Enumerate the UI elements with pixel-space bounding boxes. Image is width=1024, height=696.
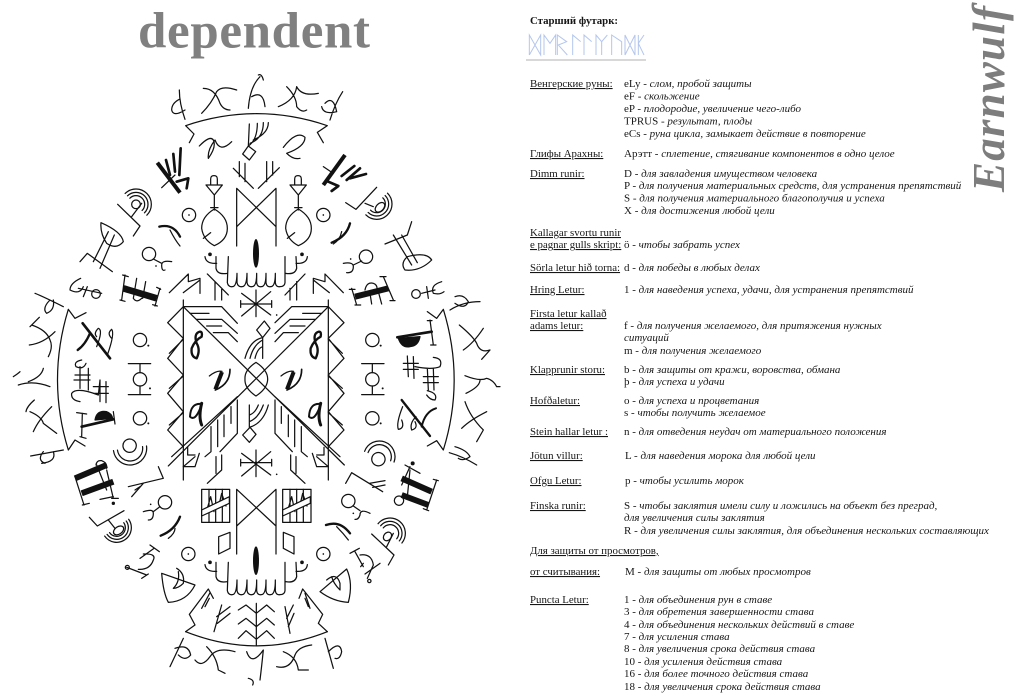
- stave: central square: [168, 290, 344, 483]
- rainbow rune: [104, 519, 137, 548]
- inner top runes: [199, 123, 305, 160]
- legend: Stein hallar letur: Stein hallar letur :: [530, 426, 608, 438]
- bold rune left: [157, 163, 180, 193]
- legend: Klapprunir storu: b - для защиты от кражи, воровства, обмана: [624, 364, 841, 376]
- bottom arc banner: [186, 603, 327, 646]
- ladder rune: [72, 360, 108, 403]
- rainbow stave: [118, 203, 142, 236]
- legend: Kallagar svortu runir: [530, 227, 740, 251]
- square frame: [183, 300, 328, 480]
- left amulet: [202, 176, 227, 246]
- legend: Hungarian runes: [530, 78, 866, 140]
- legend: Hungarian runes: Венгерские руны:: [530, 78, 613, 90]
- right amulet: [286, 176, 311, 246]
- circle marks: [182, 208, 196, 222]
- legend: anti-reading: M - для защиты от любых просмотров: [625, 566, 811, 578]
- rainbow rune: [366, 193, 398, 226]
- stave: lower-left outer runes: [75, 461, 163, 578]
- centre ellipse: [245, 362, 268, 396]
- legend: Firsta letur: [530, 308, 882, 357]
- bold H rune: [355, 288, 388, 297]
- leaf stave: [80, 223, 123, 272]
- bold rune right: [323, 155, 345, 185]
- legend: Hungarian runes: eF - скольжение: [624, 90, 700, 102]
- leaf stave: [385, 222, 432, 270]
- rainbow rune: [361, 437, 399, 471]
- legend: Ofgu Letur: Ofgu Letur:: [530, 475, 582, 487]
- fork runes: [214, 605, 294, 633]
- legend: Dimm runir: [530, 168, 962, 217]
- legend: Firsta letur: m - для получения желаемого: [624, 345, 762, 357]
- Z rune: [402, 400, 430, 436]
- legend: anti-reading: от считывания:: [530, 566, 600, 578]
- lower oval: [253, 546, 259, 575]
- stave: top section: [142, 75, 373, 300]
- stave: right side: [349, 277, 500, 471]
- bottom arc runes: [170, 638, 342, 685]
- top snowflake: [241, 290, 272, 317]
- legend: Firsta letur: ситуаций: [624, 332, 669, 344]
- left arc runes: [13, 293, 63, 463]
- bold H rune: [123, 288, 157, 298]
- left bold letters: [190, 332, 230, 425]
- legend: Hofdaletur: s - чтобы получить желаемое: [624, 407, 766, 419]
- top fan rune: [245, 321, 270, 358]
- legend: Dimm runir: Dimm runir:: [530, 168, 585, 180]
- legend: Puncta Letur: 8 - для увеличения срока действия става: [624, 643, 816, 655]
- Z rune: [83, 323, 110, 358]
- thorn rune: [82, 419, 113, 427]
- legend: Firsta letur: adams letur:: [530, 320, 583, 332]
- legend: Dimm runir: D - для завладения имуществом человека: [624, 168, 818, 180]
- lower mask: [205, 562, 307, 595]
- legend: Puncta Letur: 3 - для обретения завершенности става: [624, 606, 814, 618]
- legend: Klapprunir storu: þ - для успеха и удачи: [624, 376, 725, 388]
- right zigzag: [328, 307, 344, 447]
- left arc banner: [57, 309, 86, 450]
- o-f rune: [412, 290, 420, 298]
- column of circles: [133, 333, 147, 347]
- legend: Dimm runir: S - для получения материального благополучия и успеха: [624, 192, 885, 204]
- lower circles: [182, 547, 195, 561]
- small hook rune: [127, 545, 159, 578]
- legend: anti-reading: [530, 566, 811, 578]
- squiggle runes: [159, 223, 350, 243]
- legend: Kallagar svortu runir: ö - чтобы забрать успех: [624, 239, 740, 251]
- lower squiggles: [161, 517, 350, 536]
- legend: Jotun villur: Jötun villur:: [530, 450, 583, 462]
- left shield rune: [162, 568, 195, 602]
- legend: Puncta Letur: 16 - для более точного действия става: [624, 668, 809, 680]
- lower snowflake: [241, 450, 272, 477]
- legend: Jotun villur: [530, 450, 816, 462]
- left hatched box: [202, 489, 230, 522]
- legend: Finska runir: Finska runir:: [530, 500, 586, 512]
- legend: Dimm runir: X - для достижения любой цели: [624, 205, 775, 217]
- stave: left side: [13, 275, 161, 467]
- legend: Finska runir: [530, 500, 989, 537]
- right arc banner: [427, 309, 454, 450]
- legend: Ofgu Letur: p - чтобы усилить морок: [625, 475, 745, 487]
- diagonal cross: [168, 307, 344, 466]
- legend: Hring Letur: 1 - для наведения успеха, удачи, для устранения препятствий: [624, 284, 914, 296]
- bold H rune: [75, 465, 113, 493]
- rainbow rune: [373, 512, 412, 550]
- legend: Sorla letur: Sörla letur hið torna:: [530, 262, 620, 274]
- legend: Puncta Letur: Puncta Letur:: [530, 594, 589, 606]
- legend: Hofdaletur: Hofðaletur:: [530, 395, 580, 407]
- legend: Kallagar svortu runir: e pagnar gulls skript:: [530, 239, 621, 251]
- bold H rune: [402, 478, 432, 505]
- legend: Hungarian runes: TPRUS - результат, плоды: [624, 116, 753, 128]
- legend: Puncta Letur: 7 - для усиления става: [624, 631, 730, 643]
- thorn rune: [397, 332, 432, 337]
- legend: protection heading: Для защиты от просмотров,: [530, 545, 659, 557]
- circle-fork runes: [153, 259, 362, 273]
- legend: Sorla letur: d - для победы в любых делах: [624, 262, 760, 274]
- legend: Puncta Letur: 10 - для усиления действия става: [624, 656, 783, 668]
- lower-right stave lines: [275, 400, 328, 483]
- legend: Arachne glyphs: Арэтт - сплетение, стягивание компонентов в одно целое: [624, 148, 895, 160]
- mountain runes: [186, 589, 327, 632]
- left zigzag: [168, 307, 183, 447]
- legend: Arachne glyphs: Глифы Арахны:: [530, 148, 603, 160]
- upper mask: [205, 257, 307, 287]
- upper oval: [253, 239, 259, 268]
- legend: Hungarian runes: eCs - руна цикла, замыкает действие в повторение: [624, 128, 866, 140]
- legend: Klapprunir storu: [530, 364, 841, 388]
- heading: elder futhark: Старший футарк:: [530, 15, 618, 27]
- legend: Finska runir: R - для увеличения силы заклятия, для объединения нескольких составляющих: [624, 525, 989, 537]
- right shield rune: [320, 569, 350, 602]
- author signature: Earnwulf: [964, 2, 1014, 193]
- rainbow stave: [346, 187, 377, 209]
- legend: Firsta letur: Firsta letur kallað: [530, 308, 607, 320]
- rainbow rune: [122, 183, 158, 218]
- top arc banner: [186, 114, 327, 143]
- right bold letters: [281, 332, 321, 425]
- stave with fork: [128, 467, 163, 497]
- stave: lower-right outer runes: [346, 461, 438, 583]
- legend: Firsta letur: f - для получения желаемого, для притяжения нужных: [624, 320, 882, 332]
- rainbow stave: [372, 533, 394, 565]
- stave: upper-left outer runes: [80, 183, 158, 272]
- legend: Finska runir: S - чтобы заклятия имели силу и ложились на объект без преград,: [624, 500, 938, 512]
- right arc runes: [449, 296, 500, 465]
- parallelogram runes: [219, 532, 294, 554]
- legend: Klapprunir storu: Klapprunir storu:: [530, 364, 605, 376]
- legend: Kallagar svortu runir: Kallagar svortu runir: [530, 227, 621, 239]
- rainbow rune: [112, 437, 149, 467]
- legend: Ofgu Letur: [530, 475, 745, 487]
- legend: Hring Letur: Hring Letur:: [530, 284, 585, 296]
- stave with fork: [346, 473, 385, 492]
- legend: Jotun villur: L - для наведения морока для любой цели: [625, 450, 816, 462]
- lower-left stave lines: [183, 400, 237, 483]
- lower circle-fork runes: [143, 506, 370, 520]
- legend: Puncta Letur: 1 - для объединения рун в ставе: [624, 594, 772, 606]
- lower bowtie rune: [237, 489, 276, 554]
- legend: Puncta Letur: 4 - для объединения нескольких действий в ставе: [624, 619, 854, 631]
- ladder rune: [403, 356, 441, 400]
- legend: Sorla letur: [530, 262, 760, 274]
- o-f rune: [70, 278, 102, 297]
- stave: bottom section: [143, 489, 370, 685]
- upper X fragments: [169, 274, 343, 300]
- legend: Hofdaletur: [530, 395, 766, 419]
- legend: Dimm runir: P - для получения материальных средств, для устранения препятствий: [624, 180, 962, 192]
- legend: Finska runir: для увеличения силы заклятия: [624, 512, 765, 524]
- title: dependent: [138, 4, 370, 60]
- legend: Puncta Letur: 18 - для увеличения срока действия става: [624, 681, 821, 693]
- rainbow stave: [89, 511, 124, 528]
- legend: Hungarian runes: eP - плодородие, увеличение чего-либо: [624, 103, 801, 115]
- top arc runes: [172, 75, 343, 120]
- futhark rune row: [526, 35, 646, 60]
- legend: Hungarian runes: eLy - слом, пробой защиты: [624, 78, 752, 90]
- stave: upper-right outer runes: [346, 187, 432, 270]
- bowtie rune with branches: [233, 162, 279, 246]
- column of circles: [366, 333, 379, 347]
- small hook rune: [350, 548, 380, 578]
- legend: Hofdaletur: o - для успеха и процветания: [624, 395, 759, 407]
- right hatched box: [283, 489, 311, 522]
- lower fan rune: [243, 405, 268, 442]
- legend: Stein hallar letur: n - для отведения неудач от материального положения: [624, 426, 886, 438]
- legend: Puncta Letur: [530, 594, 854, 693]
